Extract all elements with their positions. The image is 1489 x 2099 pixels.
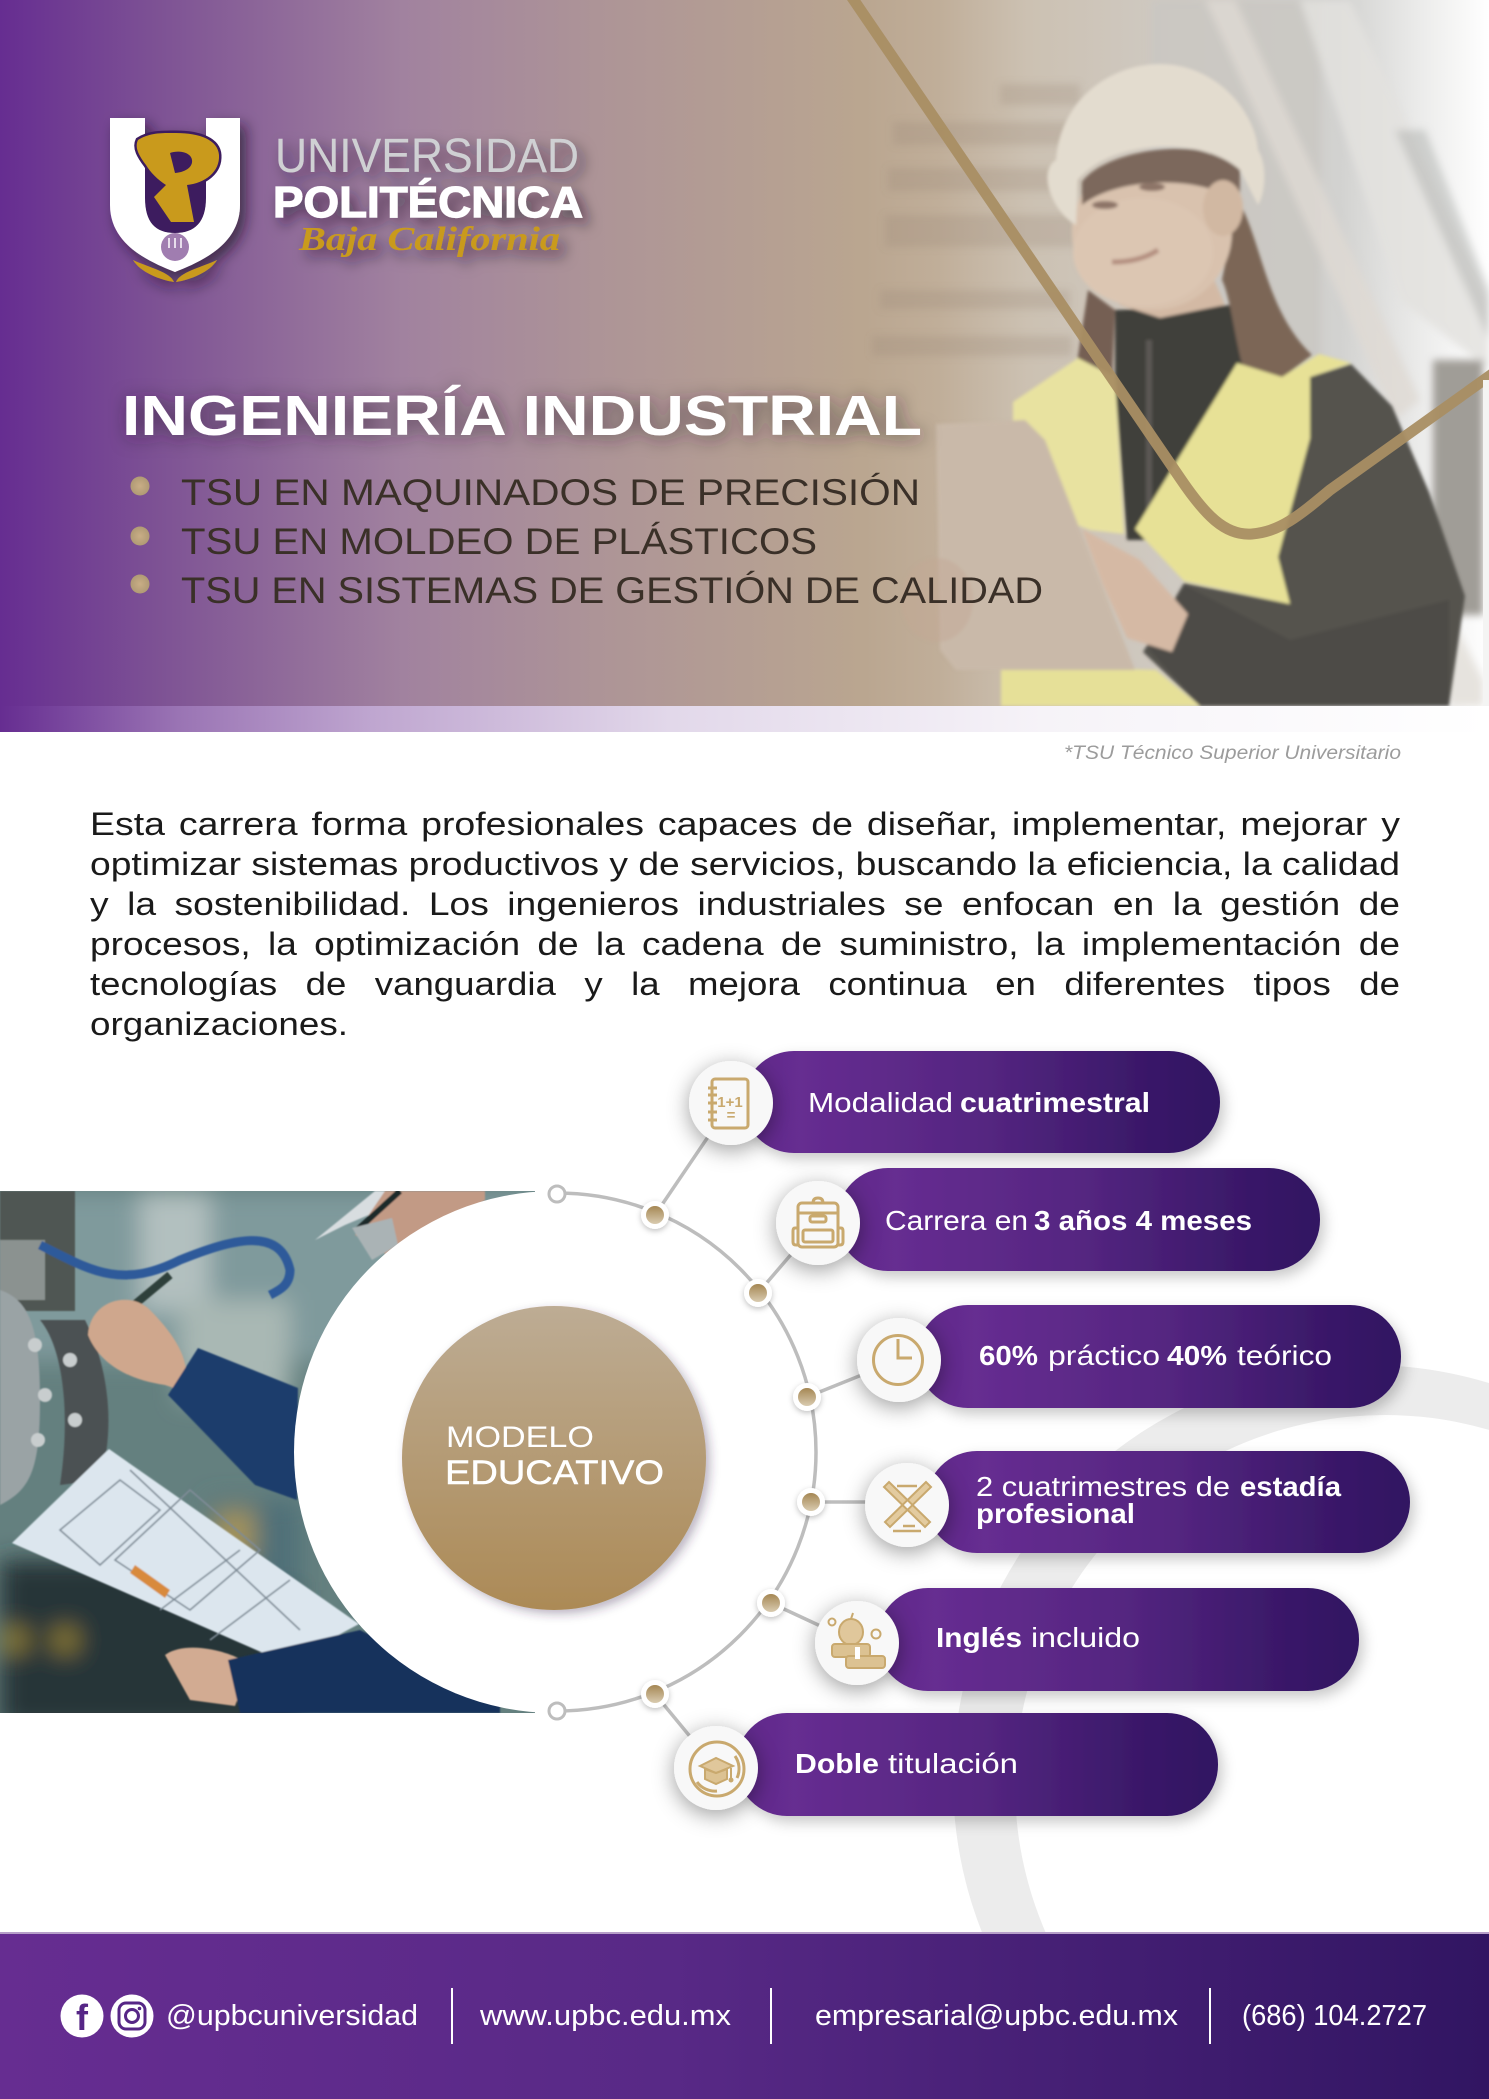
lower sleeve	[228, 1630, 500, 1713]
pill: modalidad: cuatrimestral	[960, 1087, 1150, 1118]
hair	[1222, 198, 1312, 390]
tablet	[936, 420, 1135, 670]
blueprint	[12, 1449, 359, 1663]
pill: práctico teórico: práctico	[1048, 1340, 1160, 1371]
worker head and helmet	[316, 1191, 386, 1240]
logo wordmark: POLITÉCNICA	[273, 177, 583, 227]
footer background	[0, 1932, 1489, 2099]
description paragraph: y la sostenibilidad. Los ingenieros industriales se enfocan en la gestión de	[90, 886, 1400, 922]
bullet	[130, 574, 150, 594]
description paragraph: Esta carrera forma profesionales capaces de diseñar, implementar, mejorar y	[90, 806, 1400, 842]
pill: práctico teórico	[917, 1305, 1401, 1408]
helmet	[1047, 64, 1264, 225]
pill: inglés: Inglés	[936, 1622, 1022, 1653]
banner background gradient	[0, 0, 1489, 706]
pill: doble titulación	[736, 1713, 1218, 1816]
icon: instagram	[110, 1994, 154, 2038]
pill: duración: 3 años 4 meses	[1034, 1205, 1252, 1236]
central gold circle: modelo educativo: MODELO	[446, 1421, 594, 1454]
pill: duración: Carrera en	[885, 1205, 1028, 1236]
decorative grey ring	[954, 1366, 1489, 1932]
hand with pen	[132, 1271, 173, 1304]
pill: doble titulación: Doble	[795, 1748, 879, 1779]
jacket	[1143, 364, 1465, 706]
icon: apple and books	[815, 1601, 899, 1685]
pill: estadía profesional: 2 cuatrimestres de	[976, 1471, 1230, 1502]
pill: duración	[837, 1168, 1320, 1271]
central gold circle: modelo educativo: EDUCATIVO	[445, 1454, 664, 1492]
pill: doble titulación: titulación	[888, 1748, 1018, 1779]
open end nodes	[549, 1186, 565, 1719]
logo: Universidad Politécnica Baja California	[110, 118, 583, 282]
logo wordmark: Baja California	[298, 221, 560, 258]
description paragraph: optimizar sistemas productivos y de servicios, buscando la eficiencia, la calidad	[90, 846, 1400, 882]
logo wordmark: UNIVERSIDAD	[275, 130, 579, 183]
description paragraph: organizaciones.	[90, 1006, 348, 1042]
logo shield	[110, 118, 240, 282]
program 3: TSU EN SISTEMAS DE GESTIÓN DE CALIDAD	[181, 570, 1043, 611]
description paragraph: procesos, la optimización de la cadena de suministro, la implementación de	[90, 926, 1400, 962]
bullet	[130, 526, 150, 546]
bullet	[130, 476, 150, 496]
hands	[1082, 529, 1188, 652]
logo wordmark	[273, 130, 583, 258]
icon: notebook: =	[727, 1107, 736, 1124]
blue hose	[40, 1241, 290, 1295]
icon: facebook	[60, 1994, 104, 2038]
program list	[130, 472, 1043, 611]
central white circle	[294, 1191, 816, 1713]
icon: notebook: 1+1	[717, 1094, 743, 1111]
pill: inglés: incluido	[1031, 1622, 1140, 1653]
pill: estadía profesional: profesional	[976, 1498, 1135, 1529]
icon: graduation cap	[674, 1726, 758, 1810]
icon: clock	[857, 1318, 941, 1402]
outer arc and connectors	[557, 1103, 907, 1768]
timeline nodes	[641, 1201, 825, 1708]
face details	[1092, 201, 1118, 209]
phone: (686) 104.2727	[1242, 2000, 1427, 2032]
lower hand	[165, 1648, 250, 1706]
email: empresarial@upbc.edu.mx	[815, 2000, 1179, 2032]
website: www.upbc.edu.mx	[479, 2000, 732, 2032]
gradient strip under banner	[0, 706, 1489, 732]
social handle: @upbcuniversidad	[166, 2000, 418, 2032]
pill: práctico teórico: teórico	[1237, 1340, 1332, 1371]
program 2: TSU EN MOLDEO DE PLÁSTICOS	[181, 521, 817, 562]
pill: modalidad	[743, 1051, 1220, 1153]
central gold circle: modelo educativo	[402, 1306, 706, 1610]
vest	[1013, 358, 1124, 534]
pill: modalidad: Modalidad	[808, 1087, 953, 1118]
industrial photo	[0, 1191, 535, 1730]
pill: estadía profesional: estadía	[1240, 1471, 1341, 1502]
title: INGENIERÍA INDUSTRIAL	[122, 384, 922, 448]
description paragraph	[90, 806, 1400, 1042]
faded photo: engineer on stairs	[872, 0, 1489, 706]
machine	[0, 1191, 75, 1311]
icon: facebook: f	[76, 1997, 89, 2038]
pill: estadía profesional	[926, 1451, 1410, 1553]
footnote: *TSU Técnico Superior Universitario	[1064, 743, 1401, 764]
icon: notebook	[689, 1061, 773, 1145]
program 1: TSU EN MAQUINADOS DE PRECISIÓN	[181, 472, 920, 513]
pill: práctico teórico: 40%	[1167, 1340, 1227, 1371]
black top	[1115, 305, 1245, 540]
gold curved line	[851, 0, 1489, 534]
sleeve	[168, 1348, 298, 1500]
icon: backpack	[776, 1181, 860, 1265]
pill: inglés	[877, 1588, 1359, 1691]
neck and face	[1126, 281, 1226, 320]
pill: práctico teórico: 60%	[979, 1340, 1038, 1371]
header banner	[0, 0, 1489, 706]
icon: crossed pencils	[865, 1463, 949, 1547]
description paragraph: tecnologías de vanguardia y la mejora continua en diferentes tipos de	[90, 966, 1400, 1002]
footer	[0, 1932, 1489, 2099]
